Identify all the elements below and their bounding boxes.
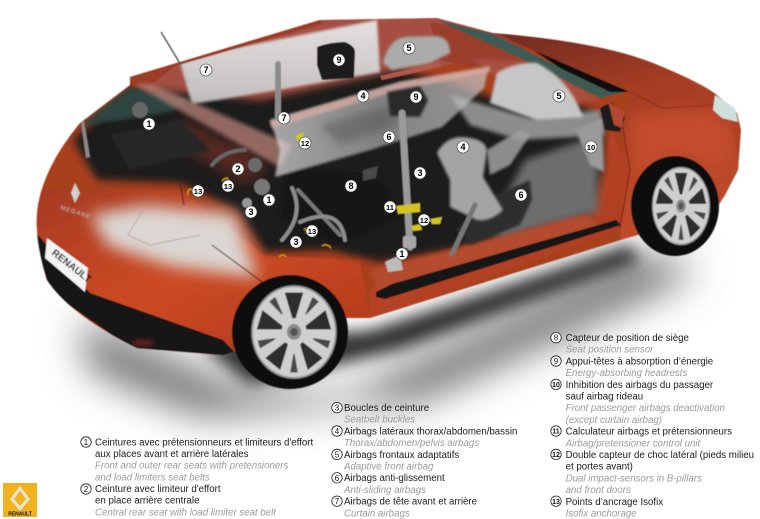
mirror cap bbox=[608, 101, 624, 128]
legend item 6 bbox=[332, 473, 445, 496]
legend item 10: Front passenger airbags deactivation bbox=[566, 403, 725, 414]
model name: MEGANE bbox=[59, 205, 92, 221]
rear cabin red reflection bbox=[170, 120, 270, 185]
legend column 1 bbox=[81, 437, 313, 518]
legend item 7: 7 bbox=[335, 497, 340, 506]
seat: rear bench bbox=[288, 172, 342, 246]
marker 5 driver bbox=[403, 42, 415, 54]
far curtain airbag bbox=[180, 20, 380, 104]
logo diamond bbox=[10, 486, 30, 511]
rear black bumper bbox=[36, 233, 240, 358]
legend item 11: Calculateur airbags et prétensionneurs bbox=[566, 427, 732, 438]
door mirror bbox=[600, 102, 625, 132]
marker 1 centre: 1 bbox=[266, 195, 272, 205]
car body shell bbox=[30, 10, 750, 370]
seat: front bbox=[455, 180, 532, 245]
legend item 11: Airbag/pretensioner control unit bbox=[565, 438, 702, 449]
legend item 12: 12 bbox=[552, 452, 560, 459]
marker 11 bbox=[384, 201, 396, 213]
marker 5 driver: 5 bbox=[406, 43, 412, 53]
marker 1 centre bbox=[263, 194, 275, 206]
marker 3 rear bbox=[245, 206, 257, 218]
marker 13 left bbox=[192, 185, 204, 197]
windscreen wiper strip bbox=[533, 50, 630, 92]
side rubbing strip bbox=[376, 220, 621, 299]
roof rear spoiler bbox=[130, 20, 322, 86]
curtain dark folds bbox=[320, 105, 400, 145]
window glass outline bbox=[128, 207, 200, 245]
cabin floor front bbox=[490, 135, 598, 240]
passenger airbag bbox=[490, 63, 583, 120]
marker 12 lower bbox=[418, 214, 430, 226]
rear window teal glass bbox=[80, 88, 190, 125]
tail reflector bbox=[131, 339, 155, 347]
marker 1 lower bbox=[396, 248, 408, 260]
numbered markers bbox=[143, 42, 597, 260]
legend item 2: Ceinture avec limiteur d'effort bbox=[95, 484, 221, 495]
marker 9 rear: 9 bbox=[336, 55, 342, 65]
marker 8 bbox=[345, 180, 357, 192]
marker 5 passenger: 5 bbox=[556, 91, 562, 101]
legend item 2 bbox=[81, 484, 277, 518]
door speaker panel bbox=[576, 118, 604, 172]
legend item 10 bbox=[551, 379, 725, 426]
legend item 7: Curtain airbags bbox=[344, 508, 410, 519]
marker 2 bbox=[232, 163, 244, 175]
legend item 1: and load limiters seat belts bbox=[95, 472, 210, 483]
rear headrest bbox=[317, 42, 355, 80]
marker 8: 8 bbox=[348, 181, 354, 191]
legend item 10: Inhibition des airbags du passager bbox=[566, 380, 714, 391]
legend item 1 bbox=[81, 437, 313, 483]
front wheel bbox=[631, 156, 719, 256]
legend item 4: 4 bbox=[335, 427, 340, 436]
legend item 11: 11 bbox=[552, 429, 560, 436]
roof rail far bbox=[380, 62, 441, 80]
legend item 5: Airbags frontaux adaptatifs bbox=[344, 450, 459, 461]
marker 13 right bbox=[306, 225, 318, 237]
legend item 12 bbox=[551, 449, 754, 496]
marker 3 rear: 3 bbox=[248, 207, 254, 217]
legend item 4: Thorax/abdomen/pelvis airbags bbox=[344, 438, 479, 449]
far side door through glass bbox=[430, 22, 526, 67]
red glass above dashboard bbox=[470, 58, 600, 105]
marker 6 lower bbox=[515, 189, 527, 201]
legend item 9 bbox=[551, 356, 713, 379]
marker 3 lower: 3 bbox=[293, 237, 299, 247]
legend item 1: aux places avant et arrière latérales bbox=[95, 449, 249, 460]
yellow sensors and control unit bbox=[296, 132, 442, 231]
legend item 1: 1 bbox=[84, 438, 89, 447]
marker 7 near bbox=[278, 112, 290, 124]
legend item 13: Points d’ancrage Isofix bbox=[566, 497, 663, 508]
marker 12 rear pillar: 12 bbox=[301, 139, 309, 148]
rear pillar translucent bbox=[133, 84, 292, 167]
license plate: RENAULT bbox=[49, 248, 93, 285]
legend item 5: Adaptive front airbag bbox=[343, 462, 434, 472]
legend item 11 bbox=[551, 426, 732, 449]
marker 7 far bbox=[200, 64, 212, 76]
rear wiper bbox=[81, 121, 90, 158]
marker 4 near bbox=[457, 141, 469, 153]
marker 7 far: 7 bbox=[203, 65, 209, 75]
driver airbag bbox=[383, 36, 450, 70]
airbag extension bbox=[487, 130, 530, 175]
marker 13 left: 13 bbox=[194, 187, 202, 196]
legend item 12: Double capteur de choc latéral (pieds milieu bbox=[566, 450, 754, 461]
marker 12 lower: 12 bbox=[420, 216, 428, 225]
door shut line bbox=[620, 123, 630, 228]
marker 3 lower bbox=[290, 236, 302, 248]
interior dark bbox=[73, 70, 604, 262]
legend item 8: Seat position sensor bbox=[566, 345, 654, 356]
legend item 8 bbox=[551, 332, 689, 356]
marker 9 front bbox=[410, 91, 422, 103]
legend item 7 bbox=[332, 496, 477, 519]
legend item 13 bbox=[551, 496, 663, 519]
roof bbox=[142, 18, 468, 102]
seat belts bbox=[212, 64, 475, 254]
legend item 7: Airbags de tête avant et arrière bbox=[344, 497, 477, 508]
marker 3 front bbox=[414, 167, 426, 179]
legend item 6: Anti-sliding airbags bbox=[343, 485, 426, 496]
legend column 3 bbox=[551, 332, 754, 519]
marker 10 bbox=[585, 141, 597, 153]
marker 4 near: 4 bbox=[460, 142, 466, 152]
marker 6 upper: 6 bbox=[386, 132, 392, 142]
ground shadow bbox=[80, 245, 700, 415]
marker 13 right: 13 bbox=[308, 227, 316, 236]
legend item 9: Appui-têtes à absorption d’énergie bbox=[566, 356, 713, 367]
legend item 3: Boucles de ceinture bbox=[344, 403, 429, 414]
car illustration bbox=[30, 10, 750, 389]
air vents bbox=[363, 166, 378, 181]
marker 4 far bbox=[357, 90, 369, 102]
A pillar teal bbox=[437, 20, 625, 98]
logo wordmark: RENAULT bbox=[8, 512, 32, 518]
legend item 12: and front doors bbox=[566, 485, 631, 496]
legend item 1: Ceintures avec prétensionneurs et limiteurs d'effort bbox=[95, 437, 313, 448]
marker 7 near: 7 bbox=[281, 113, 287, 123]
antenna bbox=[161, 32, 198, 84]
side thorax airbag bbox=[437, 137, 503, 220]
marker 12 rear pillar bbox=[299, 137, 311, 149]
license plate bbox=[45, 238, 93, 292]
marker 4 far: 4 bbox=[360, 91, 366, 101]
marker 1 rear window: 1 bbox=[146, 119, 152, 129]
headlamp bbox=[713, 95, 738, 122]
legend item 10: 10 bbox=[552, 382, 560, 389]
legend item 4 bbox=[332, 426, 517, 449]
legend item 5 bbox=[332, 449, 459, 472]
rear quarter and bumper bbox=[30, 190, 370, 345]
rear wheel bbox=[232, 275, 348, 389]
roof rail near bbox=[270, 66, 490, 128]
hood line bbox=[630, 92, 716, 108]
legend item 3: 3 bbox=[335, 404, 340, 413]
legend item 6: Airbags anti-glissement bbox=[344, 473, 445, 484]
legend item 1: Front and outer rear seats with pretensioners bbox=[95, 461, 288, 472]
legend item 9: Energy-absorbing headrests bbox=[566, 368, 687, 379]
legend item 8: 8 bbox=[554, 334, 559, 343]
hood bbox=[493, 33, 745, 240]
door panel bbox=[370, 130, 630, 320]
marker 6 upper bbox=[383, 131, 395, 143]
legend item 8: Capteur de position de siège bbox=[566, 333, 689, 344]
Renault logo bbox=[3, 483, 37, 518]
trunk seam bbox=[180, 183, 262, 282]
front wing highlight bbox=[632, 112, 735, 180]
rear badge bbox=[71, 183, 80, 203]
legend item 10: (except curtain airbag) bbox=[566, 415, 662, 426]
marker 11: 11 bbox=[386, 203, 395, 212]
marker 13 upper: 13 bbox=[224, 182, 232, 191]
dashboard bbox=[450, 95, 605, 140]
legend item 9: 9 bbox=[554, 357, 559, 366]
front headrest bbox=[387, 86, 428, 117]
marker 9 front: 9 bbox=[413, 92, 419, 102]
legend item 12: et portes avant) bbox=[566, 462, 633, 473]
marker 6 lower: 6 bbox=[518, 190, 524, 200]
legend item 3 bbox=[332, 402, 429, 426]
legend item 5: 5 bbox=[335, 450, 340, 459]
near curtain airbag bbox=[270, 68, 488, 177]
rear retractor units bbox=[132, 102, 416, 272]
marker 9 rear bbox=[333, 54, 345, 66]
marker 5 passenger bbox=[553, 90, 565, 102]
rear deck translucent bbox=[90, 205, 258, 278]
legend item 2: 2 bbox=[84, 485, 89, 494]
legend item 6: 6 bbox=[335, 474, 340, 483]
legend item 13: 13 bbox=[552, 499, 560, 506]
legend item 4: Airbags latéraux thorax/abdomen/bassin bbox=[344, 426, 517, 437]
marker 2: 2 bbox=[235, 164, 241, 174]
legend item 3: Seatbelt buckles bbox=[344, 415, 415, 426]
marker 10: 10 bbox=[587, 143, 595, 152]
marker 1 rear window bbox=[143, 118, 155, 130]
Isofix anchors bbox=[188, 178, 331, 257]
parcel shelf facets bbox=[110, 120, 210, 170]
sill fade bbox=[370, 214, 600, 295]
marker 3 front: 3 bbox=[417, 168, 423, 178]
marker 13 upper bbox=[222, 180, 234, 192]
legend item 2: Central rear seat with load limiter seat belt bbox=[95, 507, 277, 518]
legend column 2 bbox=[332, 402, 517, 519]
marker 1 lower: 1 bbox=[399, 249, 405, 259]
legend item 2: en place arrière centrale bbox=[95, 496, 199, 507]
legend item 10: sauf airbag rideau bbox=[566, 392, 643, 402]
legend item 12: Dual impact-sensors in B-pillars bbox=[566, 473, 702, 484]
